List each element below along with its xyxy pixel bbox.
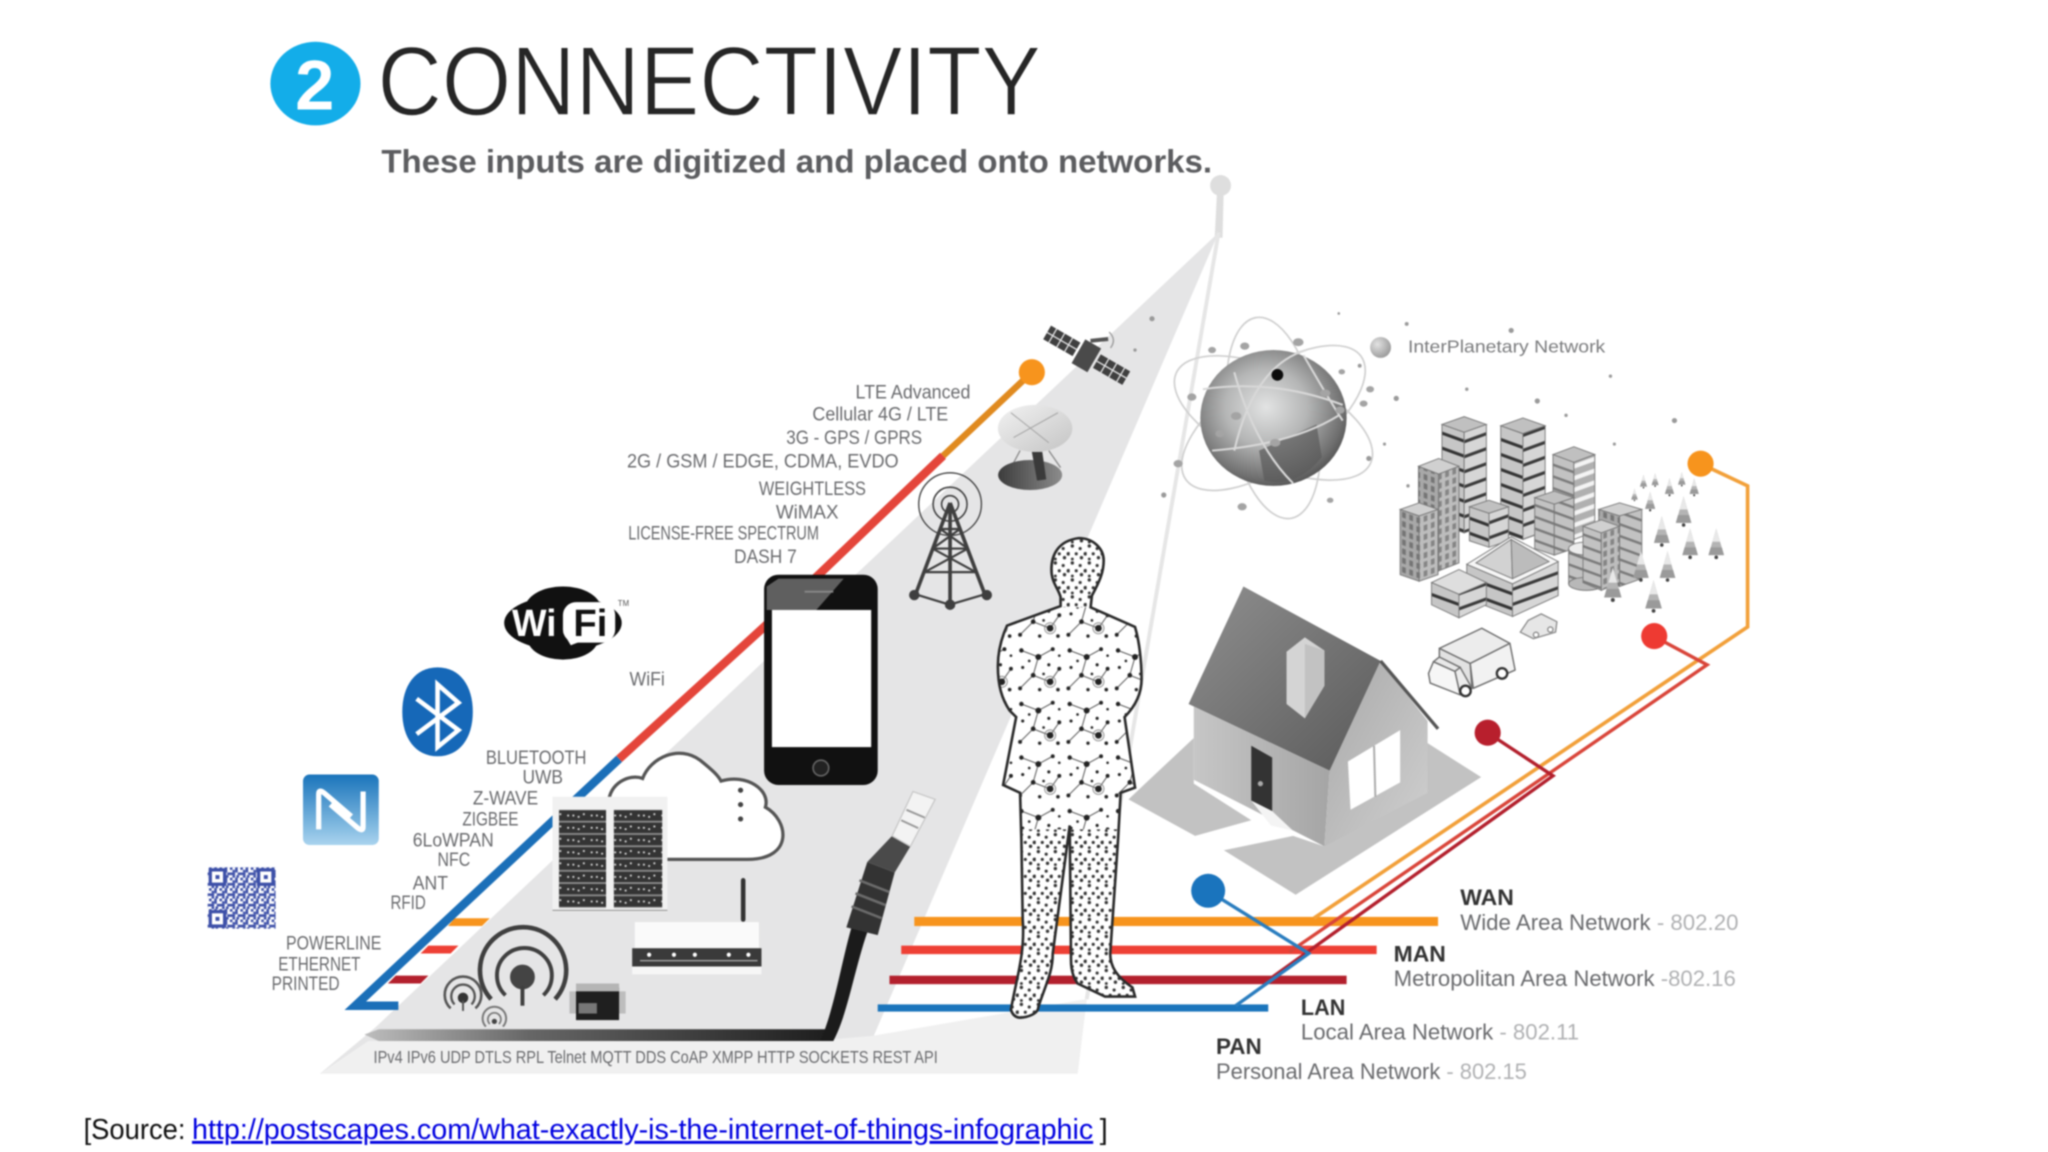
- text: WAN legend: WAN: [1460, 885, 1514, 910]
- text: wifi label: WiFi: [630, 670, 665, 691]
- text: cellular technologies: WEIGHTLESS: [759, 479, 866, 500]
- text: LAN legend: [1301, 995, 1579, 1045]
- text: short range technologies: NFC: [438, 850, 470, 871]
- chart: local area network line: [1271, 720, 1553, 978]
- icon: satellite: [1040, 305, 1142, 391]
- icon: delivery truck: [1429, 628, 1515, 696]
- icon: wifi logo: [504, 586, 629, 660]
- icon: small wireless sensor: [483, 1007, 506, 1027]
- text: short range technologies: 6LoWPAN: [413, 830, 494, 851]
- text: WAN legend: [1460, 885, 1738, 935]
- text: MAN legend: MAN: [1394, 941, 1446, 966]
- text: wired technologies: [272, 934, 381, 995]
- icon: smartphone: [764, 575, 878, 785]
- text: MAN legend: Metropolitan Area Network -802.16: [1394, 966, 1736, 991]
- icon: trees: [1604, 472, 1724, 613]
- heading: section number badge: [270, 42, 360, 125]
- icon: satellite dish: [998, 405, 1072, 490]
- text: interplanetary label: InterPlanetary Network: [1408, 337, 1605, 357]
- text: wired technologies: PRINTED: [272, 974, 340, 995]
- text: cellular technologies: DASH 7: [734, 547, 797, 568]
- text: source citation: http://postscapes.com/what-exactly-is-the-internet-of-things-infographic: [192, 1114, 1093, 1146]
- chart: main diagonal spectrum line: [355, 359, 1045, 1006]
- icon: cloud: [609, 753, 783, 859]
- text: short range technologies: ANT: [413, 873, 448, 894]
- icon: cloud dots: [738, 788, 743, 822]
- text: LAN legend: Local Area Network - 802.11: [1301, 1020, 1579, 1045]
- text: source citation: [Source:: [84, 1114, 185, 1146]
- text: cellular technologies: Cellular 4G / LTE: [812, 405, 948, 426]
- text: PAN legend: PAN: [1216, 1034, 1262, 1059]
- text: short range technologies: RFID: [391, 893, 426, 914]
- text: short range technologies: ZIGBEE: [462, 809, 519, 830]
- text: protocol list: IPv4 IPv6 UDP DTLS RPL Telnet MQTT DDS CoAP XMPP HTTP SOCKETS REST API: [374, 1047, 938, 1067]
- chart: personal area network line: [1191, 874, 1309, 1006]
- icon: bluetooth logo: [402, 667, 473, 756]
- panel: grey signal beam: [320, 175, 1231, 1074]
- text: short range technologies: Z-WAVE: [473, 789, 538, 810]
- icon: large wireless sensor: [480, 927, 566, 1006]
- text: cellular technologies: 2G / GSM / EDGE, CDMA, EVDO: [627, 452, 899, 473]
- icon: person made of network nodes: [993, 536, 1149, 1025]
- text: cellular technologies: 3G - GPS / GPRS: [786, 428, 922, 449]
- icon: city buildings: [1400, 417, 1642, 618]
- icon: router: [632, 880, 761, 974]
- icon: wifi logo: TM: [618, 599, 629, 608]
- icon: ethernet cable: [810, 792, 935, 1041]
- icon: qr code: [208, 867, 276, 929]
- icon: wifi logo: Fi: [573, 603, 607, 645]
- icon: wifi logo: Wi: [512, 603, 556, 645]
- chart: ground bar bottom: [364, 1029, 836, 1041]
- heading: title: CONNECTIVITY: [377, 26, 1041, 136]
- chart: metro area network line: [1289, 623, 1707, 952]
- text: short range technologies: [391, 748, 586, 914]
- icon: medium wireless sensor: [445, 977, 481, 1011]
- heading: section number badge: 2: [295, 46, 334, 125]
- text: cellular technologies: WiMAX: [776, 503, 839, 524]
- text: cellular technologies: LICENSE-FREE SPECTRUM: [628, 523, 819, 544]
- chart: wide area network line: [1314, 451, 1748, 918]
- text: source citation: ]: [1100, 1114, 1108, 1146]
- icon: van: [1520, 614, 1557, 639]
- icon: cell tower: [910, 473, 991, 609]
- text: cellular technologies: LTE Advanced: [856, 382, 970, 403]
- chart: network bars: [388, 917, 1438, 1012]
- icon: server racks: [552, 797, 667, 912]
- text: PAN legend: [1216, 1034, 1527, 1084]
- icon: stars: [1133, 312, 1677, 498]
- icon: chip: [569, 984, 626, 1020]
- icon: nfc logo: [303, 775, 379, 845]
- text: MAN legend: [1394, 941, 1736, 991]
- text: short range technologies: UWB: [522, 768, 563, 789]
- icon: globe with orbits: [1157, 310, 1390, 526]
- text: PAN legend: Personal Area Network - 802.15: [1216, 1059, 1527, 1084]
- text: WAN legend: Wide Area Network - 802.20: [1460, 910, 1738, 935]
- text: cellular technologies: [627, 382, 970, 568]
- text: LAN legend: LAN: [1301, 995, 1345, 1020]
- text: short range technologies: BLUETOOTH: [486, 748, 586, 769]
- icon: planet: [1370, 337, 1391, 358]
- text: wired technologies: ETHERNET: [278, 954, 361, 975]
- text: wired technologies: POWERLINE: [286, 934, 381, 955]
- icon: house: [1128, 586, 1481, 895]
- heading: subtitle: These inputs are digitized and placed onto networks.: [381, 142, 1212, 179]
